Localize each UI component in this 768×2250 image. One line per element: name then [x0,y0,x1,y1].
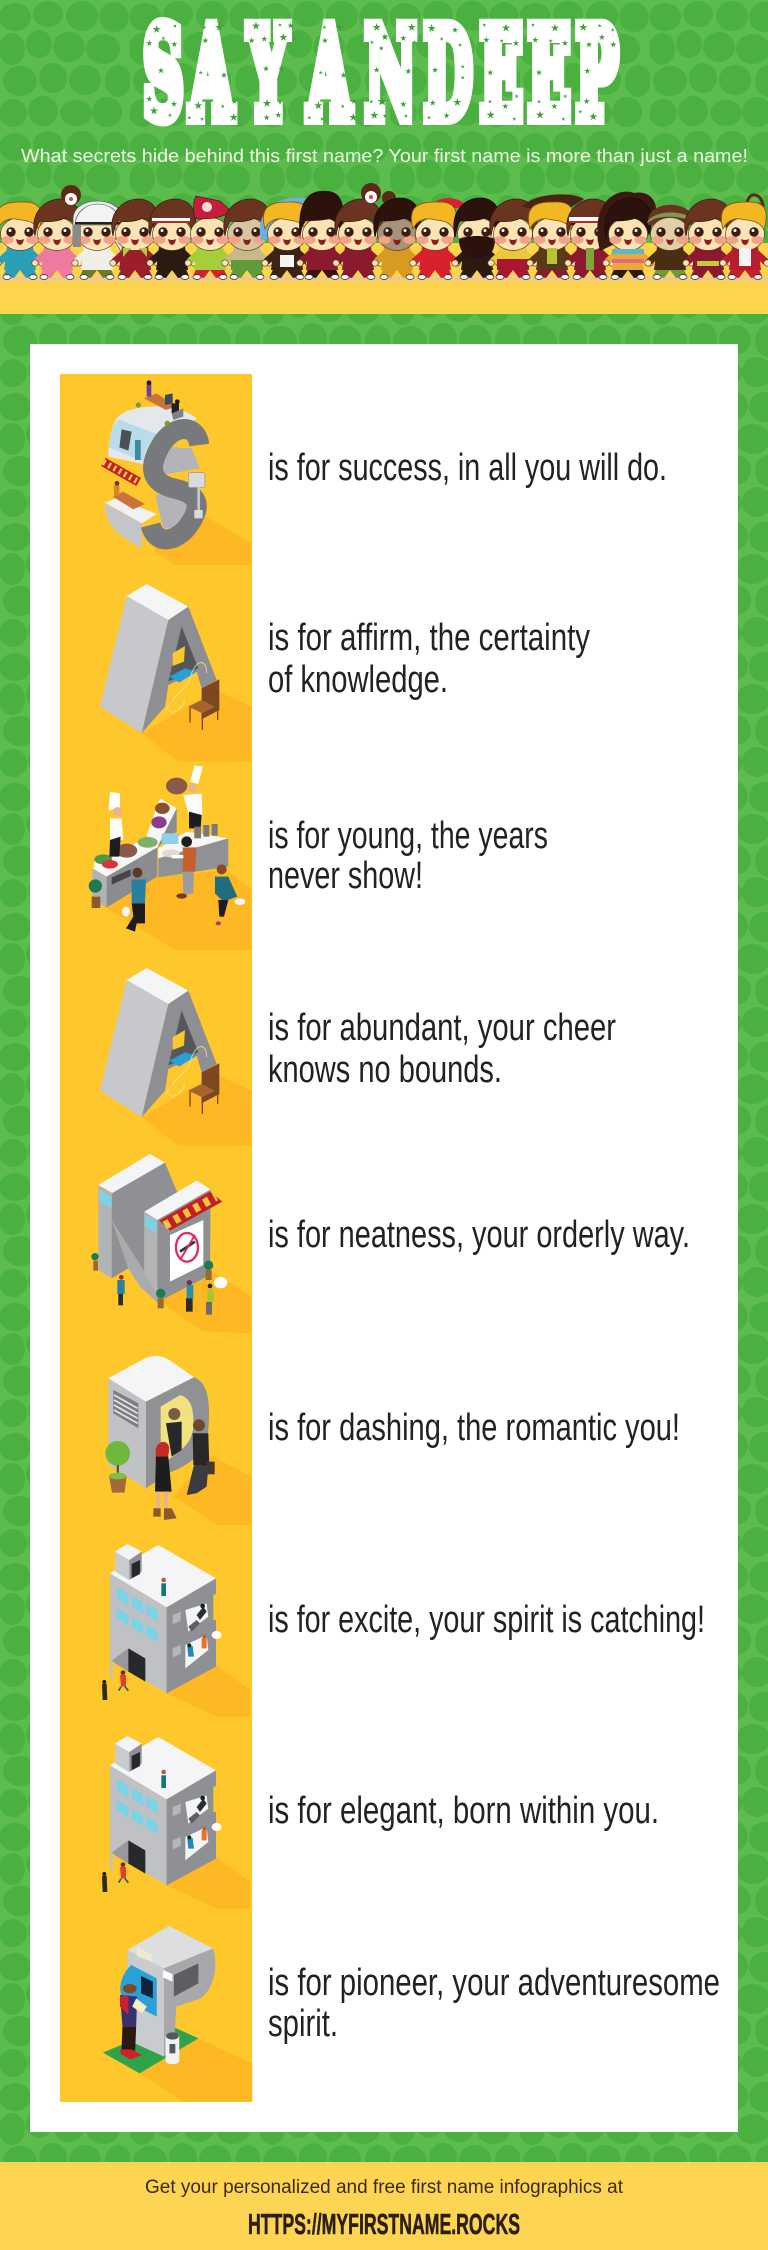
footer URL: HTTPS://MYFIRSTNAME.ROCKS [248,2209,520,2241]
child: overalls [0,202,45,279]
panel: white card holding letter rows [30,344,738,2132]
yellow illustration column [60,374,252,2102]
child: maroon tunic [683,199,733,279]
icon: buffet counter scene [89,765,252,950]
text: A lines [268,1007,616,1091]
text: P lines [268,1962,720,2045]
row: A (affirm) [100,584,590,762]
text: A lines [268,617,590,701]
child: maroon outfit with flower [333,183,383,279]
text: Y lines: is for young, the years [268,815,548,857]
icon: isometric letter P ATM [103,1926,252,2102]
text: Y lines: never show! [268,855,423,897]
icon: isometric letter S [103,380,252,565]
text: A lines: knows no bounds. [268,1049,502,1091]
row: A (abundant) [100,968,616,1146]
row: P [103,1926,720,2102]
footer: yellow call-to-action band [0,2162,768,2250]
row: N [91,1154,690,1333]
icon: isometric letter A with chair [100,584,252,762]
child: blond with brown cloak [522,194,584,279]
child: pink kimono with flower [32,185,82,279]
title: first name with star pattern: SAYANDEEP [143,1,618,147]
footer line: Get your personalized and free first name infographics at [145,2177,624,2198]
child: black tunic with headband [147,199,197,279]
banner: parade of children in costumes on yellow band [0,183,768,314]
tagline: What secrets hide behind this first name? Your first name is more than just a name! [21,145,748,166]
text: A lines: is for abundant, your cheer [268,1007,616,1049]
child: smiling with green headdress [645,205,696,279]
child: red dress and red cap [410,198,467,279]
child: blond with red and white dress [720,195,768,279]
child: maroon and green tunic [110,199,160,279]
yellow ground band [0,243,768,314]
row: Y [89,765,548,950]
icon: isometric letter E building [102,1736,250,1909]
row: E (elegant) [102,1736,659,1909]
icon: isometric letter N with no-smoking sign [91,1154,252,1333]
text: A lines: of knowledge. [268,659,448,701]
child: yellow top and spotted skirt [488,199,538,279]
icon: isometric letter E building [102,1544,250,1717]
text: A lines: is for affirm, the certainty [268,617,590,659]
child: tall black hat [297,191,347,279]
icon: isometric letter D with couple and tree [105,1356,252,1525]
child: rainbow striped shirt [597,192,656,279]
text: P lines: spirit. [268,2003,338,2045]
text: Y lines [268,815,548,897]
child: red hat and skirt [185,196,235,279]
child: golden dress [372,191,422,279]
row: S [103,380,667,565]
row: D [105,1356,680,1525]
child: black hair and beard [452,198,502,279]
child: grass skirt [222,199,272,279]
header: title and tagline [21,1,748,166]
row: E (excite) [102,1544,705,1717]
text: E line: is for elegant, born within you. [268,1790,659,1832]
child: blue cap and apron [260,198,321,279]
child: maroon robe with headband [565,199,616,279]
child: white keffiyeh [72,201,123,279]
icon: isometric letter A with chair [100,968,252,1146]
